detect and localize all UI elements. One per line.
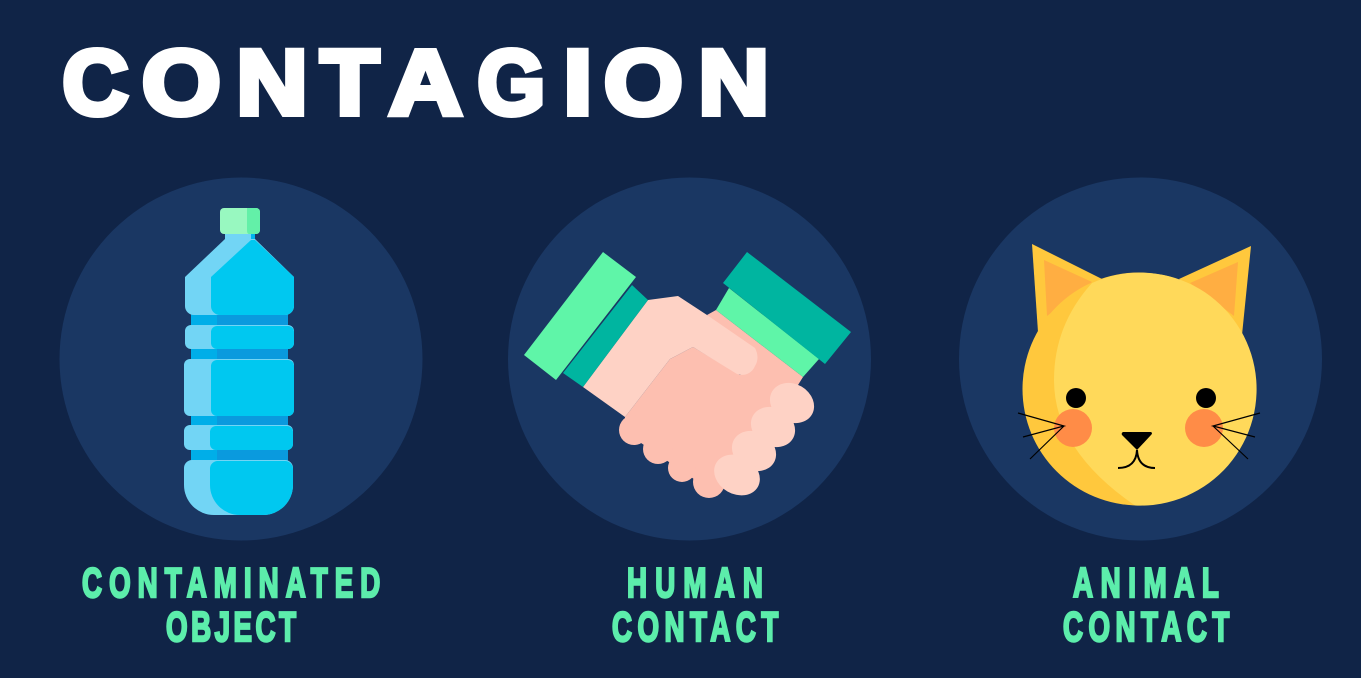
panel: contaminated object xyxy=(60,178,422,540)
icon: water bottle xyxy=(184,208,294,515)
title xyxy=(62,31,769,134)
title: N xyxy=(236,32,308,134)
title: O xyxy=(604,31,683,134)
label: contaminated object: CONTAMINATED xyxy=(82,559,380,606)
panel: animal contact xyxy=(959,178,1322,540)
background circle: human xyxy=(508,178,871,540)
panel: human contact xyxy=(508,178,871,540)
icon: handshake xyxy=(524,252,851,503)
label: contaminated object xyxy=(82,559,380,650)
label: human contact xyxy=(612,559,779,650)
label: contaminated object: OBJECT xyxy=(166,603,296,650)
title: T xyxy=(320,31,379,134)
title: I xyxy=(564,31,592,134)
icon: cat xyxy=(1018,244,1260,506)
label: human contact: CONTACT xyxy=(612,603,779,650)
label: human contact: HUMAN xyxy=(627,559,763,606)
background circle: object xyxy=(60,178,422,540)
title: O xyxy=(142,31,221,134)
label: animal contact: CONTACT xyxy=(1063,603,1230,650)
title: N xyxy=(698,32,769,134)
title: G xyxy=(478,31,545,134)
label: animal contact: ANIMAL xyxy=(1073,559,1219,606)
title: A xyxy=(389,31,462,134)
background circle: animal xyxy=(959,178,1322,540)
title: C xyxy=(62,32,128,134)
label: animal contact xyxy=(1063,559,1230,650)
